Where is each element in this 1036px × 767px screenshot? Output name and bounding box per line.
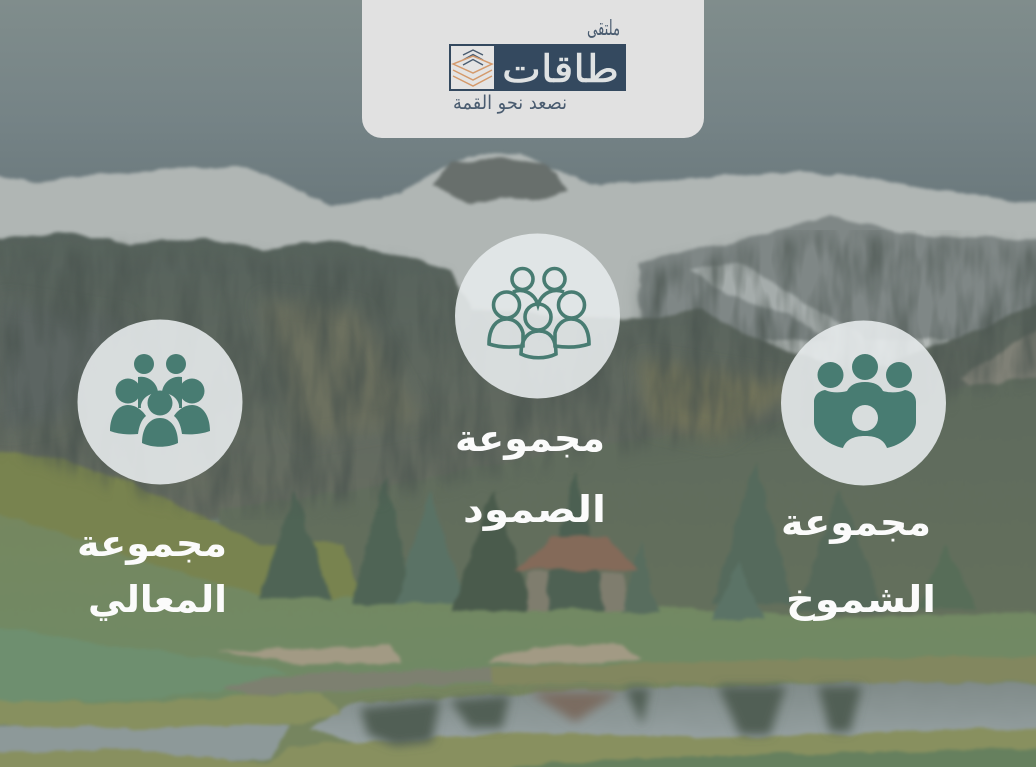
label: الشموخ: [786, 578, 936, 621]
header panel with logo: [362, 0, 704, 138]
label: الصمود: [463, 488, 606, 531]
left pond: [0, 725, 290, 760]
peak rock outcrop: [432, 158, 566, 205]
group: المعالي (left): [77, 320, 242, 621]
label: مجموعة: [781, 501, 931, 544]
dark mountain face: [0, 232, 1036, 520]
rock streak texture: [0, 230, 1036, 520]
left reeds: [0, 692, 342, 728]
group: الصمود (center): [455, 234, 620, 531]
stone wall: [222, 668, 490, 696]
logo icon: stacked layers: [451, 46, 494, 89]
small label: ملتقى: ملتقى: [587, 16, 620, 40]
group: الشموخ (right): [781, 320, 946, 621]
shoreline: [240, 682, 1036, 767]
icon: solid group of five people: [110, 354, 210, 447]
main pond: [310, 682, 1036, 747]
logo name: طاقات: طاقات: [502, 47, 619, 91]
grass slope and fairway: [0, 512, 1036, 710]
label: المعالي: [88, 578, 227, 621]
reed band: [490, 656, 1036, 686]
panel background: [362, 0, 704, 138]
circle badge: [78, 320, 242, 484]
tree reflections: [360, 686, 862, 746]
label: مجموعة: [455, 417, 605, 460]
icon: outlined group of five people: [489, 268, 589, 358]
logo box: [449, 44, 626, 91]
sky: [0, 0, 1036, 240]
snow-capped mountain range: [0, 153, 1036, 420]
forested green hillside: [220, 375, 1036, 630]
soft colour patches on the rock: [0, 300, 800, 440]
evergreen trees: [258, 460, 978, 620]
red roof house: [515, 537, 638, 570]
foreground reeds: [0, 728, 1036, 767]
sand bunkers: [220, 644, 402, 664]
bottom grass: [357, 748, 1036, 767]
aspen forest: [0, 450, 362, 600]
icon: three people with central figure cut-out: [814, 354, 916, 448]
patchy mid slopes on the right: [640, 215, 1036, 340]
putting green: [0, 625, 290, 702]
circle badge: [781, 320, 946, 486]
snowfield on right slopes: [690, 262, 905, 372]
circle badge: [455, 234, 620, 398]
logo tagline: نصعد نحو القمة: [453, 92, 567, 114]
tan slope at far right: [960, 325, 1036, 392]
label: مجموعة: [77, 522, 227, 565]
